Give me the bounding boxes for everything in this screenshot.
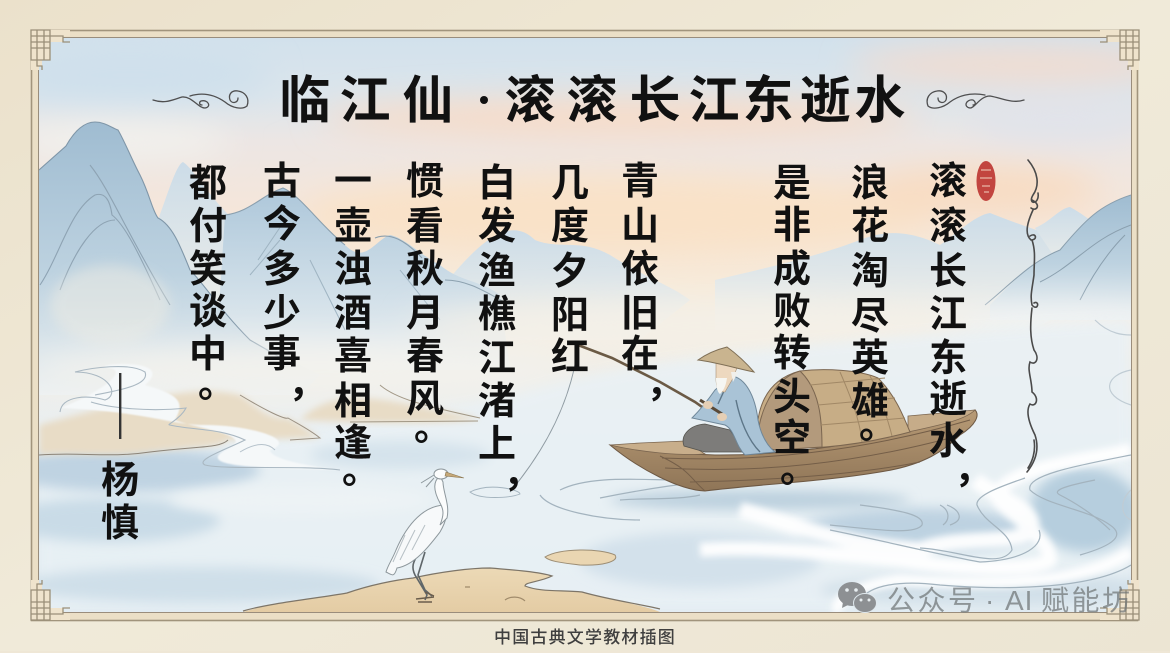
- poem column 3: 。: [780, 449, 818, 491]
- poem column 9: ，: [288, 363, 326, 405]
- poem column 9: [263, 161, 326, 405]
- far hills: [158, 162, 1088, 306]
- vertical scroll ornament: [1027, 160, 1038, 472]
- watermark: 公众号: [887, 585, 979, 616]
- poem column 6: [478, 163, 541, 495]
- poem column 10: 都付笑谈中: [189, 163, 227, 376]
- cloud scroll ornament left: [153, 91, 248, 108]
- poem column 4: [621, 161, 684, 405]
- heron: [386, 469, 464, 602]
- mist over the mountain feet: [30, 303, 1170, 394]
- poem column 6: 白发渔樵江渚上: [478, 163, 516, 466]
- poem column 3: 是非成败转头空: [773, 163, 811, 460]
- poem column 2: 。: [859, 405, 897, 447]
- big left mountain: [39, 122, 288, 375]
- title: 临江仙滚滚长江东逝水: [279, 72, 906, 129]
- icon: wechat bubbles: [838, 582, 876, 612]
- poem column 8: 一壶浊酒喜相逢: [334, 161, 372, 465]
- title separator dot: [480, 96, 488, 104]
- right water swirls: [470, 320, 1131, 612]
- distant shore left: [39, 385, 480, 455]
- mid mountains: [220, 188, 510, 344]
- watermark: AI: [1005, 585, 1033, 616]
- poem column 1: 滚滚长江东逝水: [929, 161, 967, 463]
- right mountain: [985, 195, 1131, 320]
- poem column 4: 青山依旧在: [621, 161, 659, 376]
- fisherman: [683, 347, 775, 455]
- watermark: ·: [985, 585, 994, 616]
- boat: [610, 347, 977, 491]
- canopy: [757, 370, 910, 450]
- poem column 7: 。: [414, 407, 452, 449]
- sandbank: [242, 550, 660, 612]
- poem column 9: 古今多少事: [263, 161, 301, 376]
- watermark: [838, 582, 1133, 616]
- poem column 10: 。: [198, 364, 236, 406]
- caption: 中国古典文学教材插图: [494, 627, 676, 647]
- watermark: 赋能坊: [1041, 585, 1133, 616]
- poem column 8: 。: [342, 450, 380, 492]
- water: [39, 332, 1131, 602]
- author attribution: 杨慎: [101, 460, 139, 545]
- poem column 2: 浪花淘尽英雄: [851, 163, 889, 423]
- poem column 1: [929, 161, 992, 491]
- red seal: [976, 161, 996, 201]
- white river swirl left: [60, 364, 340, 470]
- poem column 6: ，: [503, 453, 541, 495]
- fishing rod and line: [510, 345, 712, 492]
- poem column 5: 几度夕阳红: [551, 163, 589, 379]
- sunset clouds: [0, 45, 1170, 255]
- poem column 1: ，: [954, 449, 992, 491]
- poem column 4: ，: [646, 363, 684, 405]
- poem column 7: 惯看秋月春风: [406, 161, 444, 421]
- cloud scroll ornament right: [927, 91, 1024, 108]
